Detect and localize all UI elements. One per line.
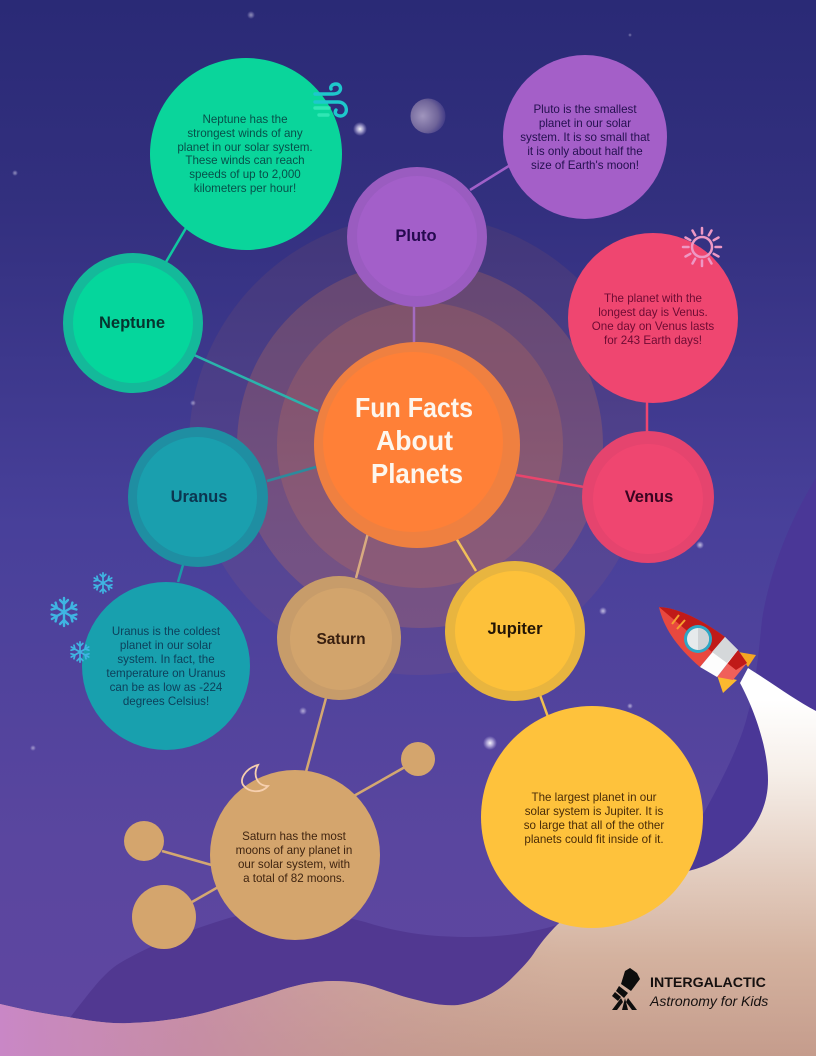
moons of Saturn	[124, 742, 435, 949]
icon: wind	[315, 84, 346, 116]
fact: Saturn: moons of any planet in	[236, 844, 352, 857]
fact: Pluto: Pluto is the smallest	[533, 103, 637, 116]
fact: Uranus	[82, 582, 250, 750]
planet: Venus: Venus	[625, 488, 673, 506]
fact: Pluto: it is only about half the	[527, 145, 643, 158]
fact: Uranus: temperature on Uranus	[106, 667, 226, 680]
fact: Neptune: planet in our solar system.	[177, 141, 313, 154]
stars	[12, 11, 704, 751]
fact: Pluto: size of Earth's moon!	[531, 159, 639, 172]
fact: Jupiter	[481, 706, 703, 928]
planet: Uranus: Uranus	[171, 488, 227, 506]
fact: Pluto: system. It is so small that	[520, 131, 651, 144]
planet: Pluto: Pluto	[395, 227, 437, 245]
icon: crescent moon	[242, 765, 268, 791]
fact: Jupiter: planets could fit inside of it.	[524, 833, 664, 846]
fact: Venus: One day on Venus lasts	[592, 320, 714, 333]
logo text: INTERGALACTIC	[650, 975, 766, 991]
fact: Jupiter: solar system is Jupiter. It is	[525, 805, 663, 818]
connector lines	[162, 164, 647, 902]
logo text: Astronomy for Kids	[649, 993, 768, 1009]
fact: Venus: The planet with the	[604, 292, 702, 305]
fact: Venus: longest day is Venus.	[598, 306, 708, 319]
fact: Neptune	[150, 58, 342, 250]
fact: Pluto: planet in our solar	[539, 117, 631, 130]
bottom dark wave	[60, 910, 560, 1056]
title text: Fun Facts	[355, 392, 473, 423]
distant moon	[410, 98, 446, 134]
fact: Neptune: These winds can reach	[185, 154, 305, 167]
fact: Uranus: Uranus is the coldest	[112, 625, 221, 638]
planet: Jupiter: Jupiter	[487, 620, 543, 638]
planet: Neptune	[63, 253, 203, 393]
title text	[355, 392, 473, 489]
fact: Uranus: can be as low as -224	[110, 681, 223, 694]
fact: Saturn	[210, 770, 380, 940]
fact: Venus	[568, 233, 738, 403]
title text: Planets	[371, 458, 463, 489]
fact: Uranus: system. In fact, the	[117, 653, 215, 666]
fact: Saturn: Saturn has the most	[242, 830, 347, 843]
sand dune and rocket trail	[0, 668, 816, 1056]
planet: Uranus	[128, 427, 268, 567]
fact: Uranus: degrees Celsius!	[123, 695, 209, 708]
icon: sun	[683, 228, 721, 266]
center planet: title	[314, 342, 520, 548]
fact: Neptune: Neptune has the	[202, 113, 288, 126]
planet: Saturn: Saturn	[316, 631, 366, 648]
fact: Neptune: strongest winds of any	[187, 127, 303, 140]
fact: Neptune: speeds of up to 2,000	[189, 168, 301, 181]
fact: Neptune: kilometers per hour!	[194, 182, 296, 195]
fact: Saturn: a total of 82 moons.	[243, 872, 345, 885]
planet: Venus	[582, 431, 714, 563]
planet: Pluto	[347, 167, 487, 307]
halo rings around sun	[189, 215, 649, 675]
fact: Jupiter: so large that all of the other	[524, 819, 664, 832]
planet: Saturn	[277, 576, 401, 700]
title text: About	[376, 425, 453, 456]
icon: rocket	[659, 607, 756, 693]
fact: Jupiter: The largest planet in our	[531, 791, 657, 804]
fact: Uranus: planet in our solar	[120, 639, 212, 652]
planet: Jupiter	[445, 561, 585, 701]
fact: Venus: for 243 Earth days!	[604, 334, 702, 347]
fact: Pluto	[503, 55, 667, 219]
right dark wave	[680, 478, 816, 900]
icons: snowflakes	[52, 573, 112, 662]
planet: Neptune: Neptune	[99, 314, 165, 332]
logo: telescope	[612, 968, 640, 1010]
logo text	[649, 975, 768, 1009]
fact: Saturn: our solar system, with	[238, 858, 350, 871]
